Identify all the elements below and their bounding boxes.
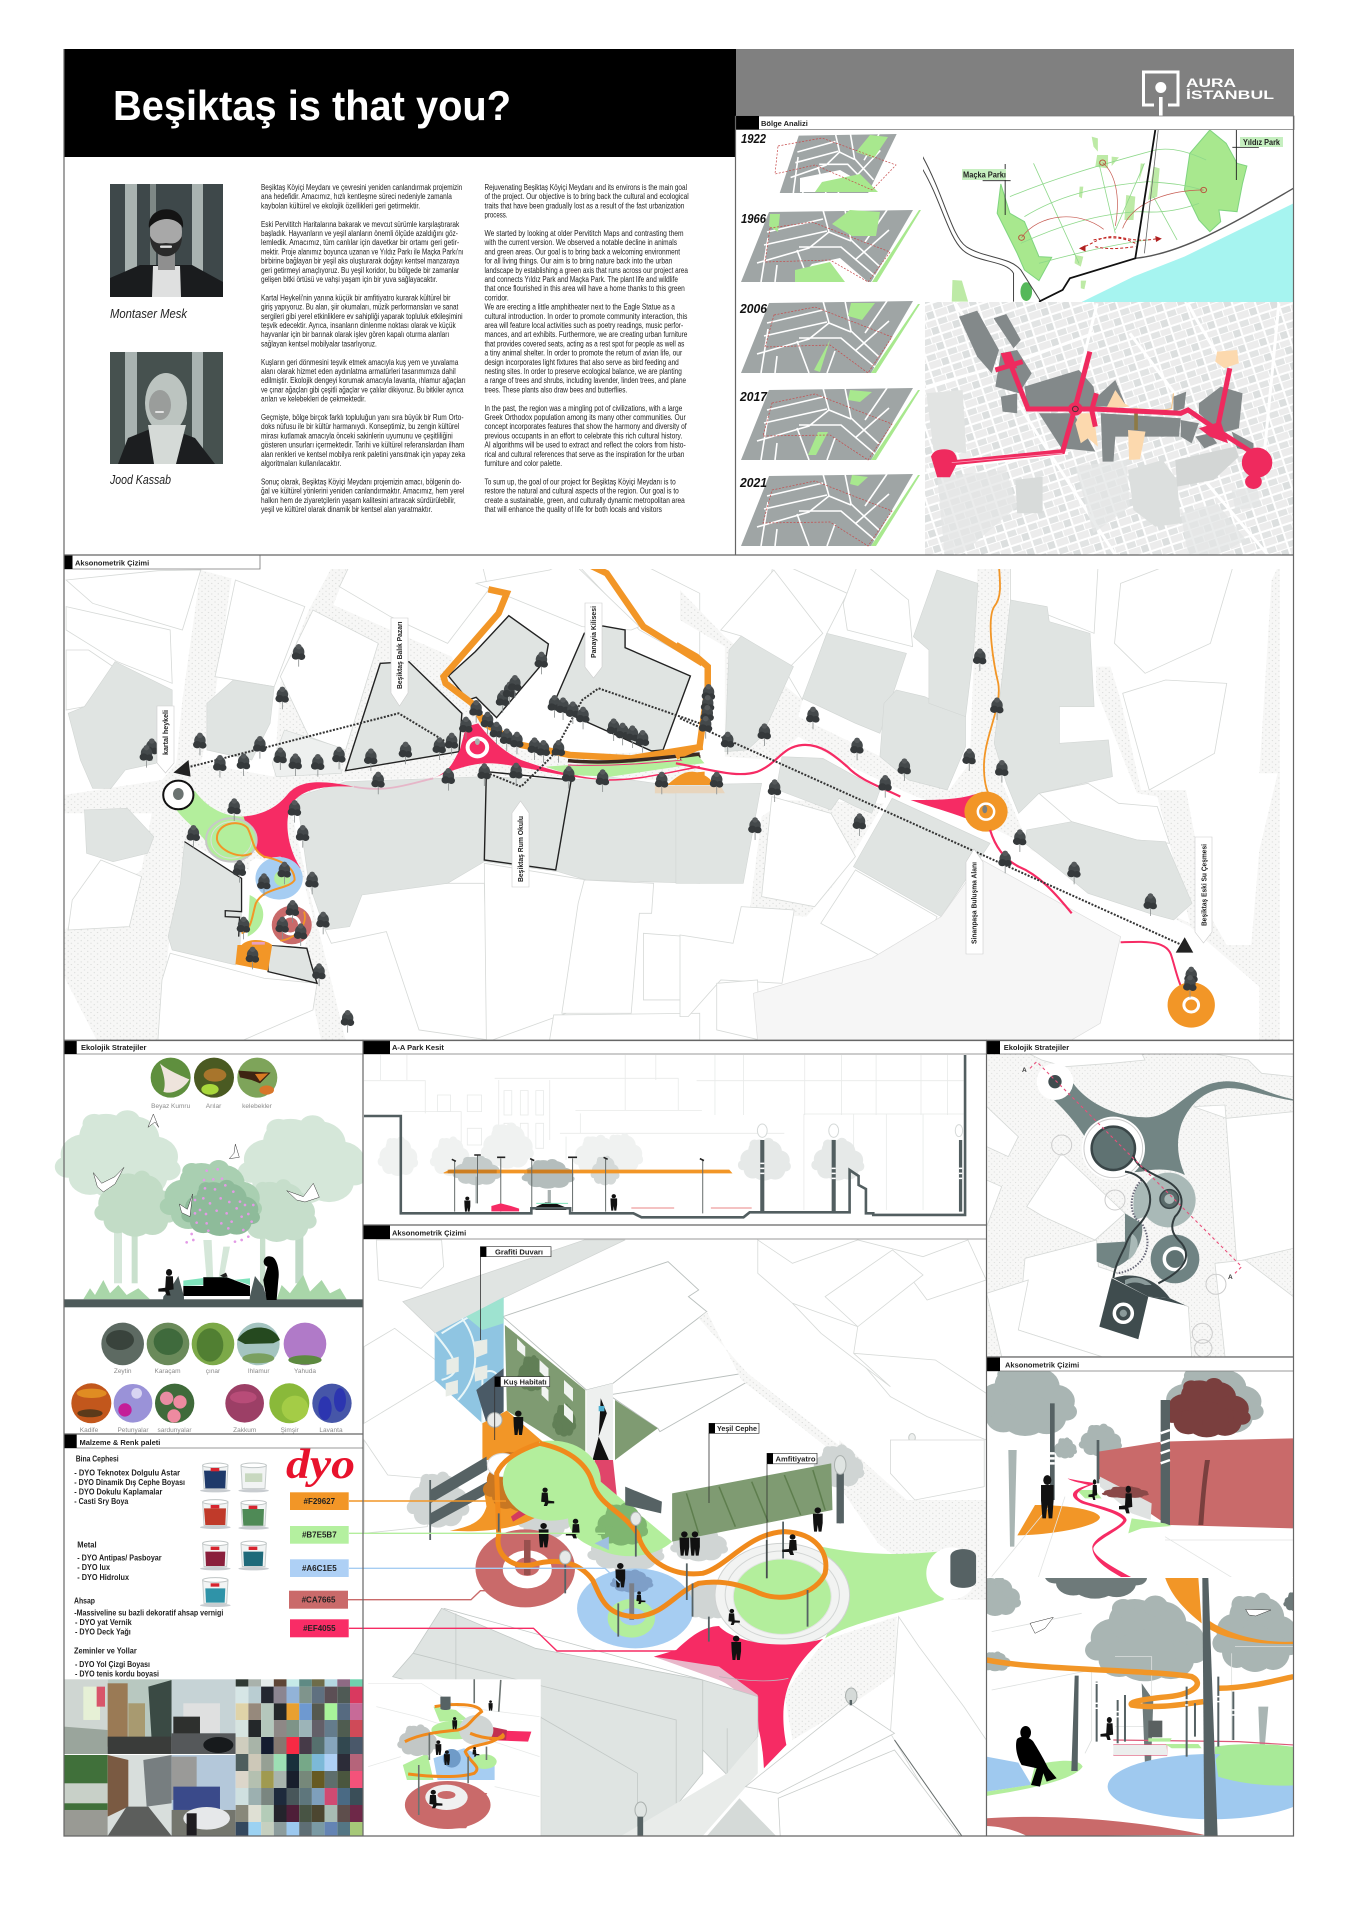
text block: Turkish description: lemledik. Amacımız, tüm canlılar için davetkar bir ortamı geri getir-	[261, 238, 459, 247]
wildlife photos	[151, 1058, 277, 1098]
material list: - DYO Yol Çizgi Boyası	[75, 1660, 150, 1669]
text block: Turkish description: ve çınar ağaçları gibi çeşitli ağaçlar ve çalılar dikiyoruz. Bu bitkiler ayrıca	[261, 385, 464, 394]
text block: English description: area will feature local activities such as poetry readings, music perfor-	[484, 321, 683, 330]
text block: English description: that once flourished in this area will have a home thanks to this green	[484, 284, 685, 293]
heading: Ekolojik Stratejiler (plan)	[986, 1040, 1294, 1054]
panel: canopy perspective with orange ribbon	[987, 1578, 1293, 1836]
text block: English description: corridor.	[484, 293, 509, 302]
species captions: Yahuda	[294, 1368, 316, 1375]
callout: Yeşil Cephe	[709, 1423, 759, 1503]
text block: Turkish description: ğal ve kültürel yönlerini yeniden canlandırmaktır. Amacımız, hem yerel	[261, 487, 465, 496]
text block: English description: traits that have been gradually lost as a result of the fast urbanization	[484, 201, 684, 210]
heading: A-A Park Kesit	[363, 1040, 986, 1054]
text block: Turkish description: halkın hem de ziyaretçilerin yaşam kalitesini artıracak sürdürülebilir,	[261, 496, 456, 505]
text block: Turkish description: sergileri gibi yerel etkinliklere ev sahipliği yaparak topluluk etkileşimini	[261, 312, 463, 321]
map series: 1966	[741, 210, 921, 282]
species captions: Lavanta	[319, 1427, 343, 1434]
label: Sinanpaşa Buluşma Alanı: Sinanpaşa Buluşma Alanı	[972, 862, 978, 944]
heading: A-A Park Kesit: A-A Park Kesit	[392, 1043, 444, 1052]
text block: Turkish description: Geçmişte, bölge birçok farklı topluluğun yanı sıra büyük bir Rum Orto-	[261, 413, 464, 422]
species captions: kelebekler	[242, 1103, 273, 1110]
name: Montaser Mesk: Montaser Mesk	[110, 306, 188, 321]
text block: Turkish description: kaybolan kültürel ve ekolojik özellikleri geri getirmektir.	[261, 201, 420, 210]
text block: Turkish description: gelişen bitki örtüsü ve vahşi yaşam için bir yuva sağlayacaktır.	[261, 275, 438, 284]
text block: Turkish description: yeşil ve kültürel olarak dinamik bir kentsel alan yaratmaktır.	[261, 505, 432, 514]
grey logo banner	[736, 49, 1294, 116]
text block: English description: for all living things. Our aim is to bring nature back into the urban	[484, 257, 672, 266]
heading: Aksonometrik Çizimi (right): Aksonometrik Çizimi	[1005, 1360, 1079, 1370]
panel: Ekolojik Stratejiler (species and section)	[55, 1040, 368, 1434]
text block: English description: of the project. Our objective is to bring back the cultural and ecological	[484, 192, 689, 201]
panel: Ekolojik Stratejiler site plan: A	[1022, 1067, 1027, 1074]
text block: English description	[484, 183, 689, 514]
panel: Ekolojik Stratejiler site plan: A	[1228, 1274, 1233, 1281]
text block: Turkish description: teşvik edecektir. Ayrıca, insanların dinlenme noktası olarak ve küçük	[261, 321, 456, 330]
text block: English description: cultural introduction. In order to promote community interaction, this	[484, 312, 687, 321]
orange corridor	[444, 557, 703, 758]
label: Beşiktaş Balık Pazarı	[391, 618, 408, 706]
callout: Kuş Habitatı: Kuş Habitatı	[504, 1379, 547, 1386]
material list: - Casti Sry Boya	[74, 1497, 129, 1506]
material list: - DYO Hidrolux	[77, 1573, 130, 1582]
callout: Amfitiyatro: Amfitiyatro	[776, 1456, 816, 1464]
text block: Turkish description: Kuşların geri dönmesini teşvik etmek amacıyla kuş yem ve yuvalama	[261, 358, 459, 367]
grey logo banner: AURA	[1186, 76, 1236, 90]
material list: Zeminler ve Yollar	[74, 1646, 137, 1655]
text block: Turkish description: arıları ve kelebekleri de çekmektedir.	[261, 395, 366, 404]
text block: Turkish description: başladık. Hayvanların ve yeşil alanların önemli ölçüde azaldığını göz-	[261, 229, 458, 238]
label: Beşiktaş Rum Okulu	[512, 801, 529, 887]
label: Yıldız Park: Yıldız Park	[1243, 138, 1280, 147]
panel: central axonometric view	[363, 1239, 986, 1836]
inset perspective	[363, 1679, 541, 1836]
text block: English description: previous occupants in an effort to celebrate this rich cultural history.	[484, 431, 682, 440]
species captions: Şimşir	[281, 1427, 300, 1434]
map series: 1922: 1922	[741, 132, 766, 146]
text block: Turkish description: sağlayan kentsel mobilyalar tasarlıyoruz.	[261, 339, 377, 348]
material list: - DYO Dinamik Dış Cephe Boyası	[74, 1478, 185, 1487]
species captions: Kadife	[80, 1427, 99, 1434]
callout: Yeşil Cephe: Yeşil Cephe	[717, 1426, 757, 1433]
species captions: Zeytin	[114, 1368, 132, 1375]
text block: Turkish description: Sonuç olarak, Beşiktaş Köyiçi Meydanı projemizin amacı, bölgenin do-	[261, 477, 462, 486]
heading: Malzeme & Renk paleti	[64, 1434, 363, 1448]
text block: Turkish description: geri getirmeyi amaçlıyoruz. Bu yeşil koridor, bu bölgede bir zamanlar	[261, 266, 459, 275]
AI colour mosaic	[236, 1679, 363, 1836]
text block: Turkish description	[261, 183, 466, 514]
text block: English description: a range of trees and shrubs, including lavender, linden trees, and plane	[484, 376, 687, 385]
heading: Ekolojik Stratejiler (plan): Ekolojik Stratejiler	[1004, 1043, 1069, 1052]
panel: Ekolojik Stratejiler site plan	[986, 1040, 1294, 1357]
right half of map: roads, buildings, route	[668, 557, 1280, 1040]
title banner	[64, 49, 736, 157]
label: Panayia Kilisesi: Panayia Kilisesi	[591, 606, 598, 658]
text block: English description: nesting sites. In order to preserve ecological balance, we are planting	[484, 367, 682, 376]
colour palette chips with leader lines: #A6C1E5	[302, 1564, 337, 1573]
map series: 1966: 1966	[741, 212, 767, 226]
text block: English description: and connects Yıldız Park and Maçka Park. The plant life and wildlife	[484, 275, 678, 284]
text block: Turkish description: doks nüfusu ile bir kültür harmanıydı. Konseptimiz, bu zengin kültürel	[261, 422, 459, 431]
callout: Grafiti Duvarı	[480, 1247, 551, 1340]
heading: Aksonometrik Çizimi (centre): Aksonometrik Çizimi	[392, 1228, 466, 1238]
colour palette chips with leader lines: #B7E5B7	[302, 1530, 337, 1540]
text block: English description: with the current version. We observed a notable decline in animals	[484, 238, 677, 247]
panel: A-A Park Kesit section	[363, 1040, 986, 1225]
text block: English description: process.	[484, 211, 508, 220]
label: Panayia Kilisesi	[585, 603, 602, 678]
text block: Turkish description: gösteren unsurları içermektedir. Tarihi ve kültürel referanslardan ilham	[261, 441, 465, 450]
material list: Bina Cephesi	[76, 1455, 119, 1464]
material list: - DYO Teknotex Dolgulu Astar	[74, 1468, 180, 1477]
species captions: Beyaz Kumru	[151, 1103, 191, 1110]
text block: Turkish description: alan renkleri ve kentsel mobilya renk paletini yansıtmak için yapay zeka	[261, 450, 466, 459]
map series: 2017	[739, 388, 920, 460]
text block: Turkish description: algoritmaları kullanılacaktır.	[261, 459, 341, 468]
text block: Turkish description: hayvanlar için bir barınak olarak işlev gören kapalı oturma alanları	[261, 330, 449, 339]
text block: Turkish description: alanı olarak hizmet eden aydınlatma armatürleri tasarımımıza dahil	[261, 367, 456, 376]
heading: Aksonometrik Çizimi (centre)	[363, 1225, 986, 1239]
text block: English description: Greek Orthodox population among its many other communities. Our	[484, 413, 686, 422]
label: Beşiktaş Eski Su Çeşmesi: Beşiktaş Eski Su Çeşmesi	[1202, 844, 1208, 926]
text block: English description: In the past, the region was a mingling pot of civilizations, with a large	[484, 404, 683, 413]
title banner: Beşiktaş is that you?	[113, 82, 511, 129]
material list: -Massiveline su bazli dekoratif ahsap vernigi	[74, 1609, 223, 1618]
text block: Turkish description: mektir. Proje alanımız boyunca uzanan ve Yıldız Parkı ile Maçka Parkı'nı	[261, 247, 464, 256]
material list: Metal	[77, 1540, 97, 1549]
text block: English description: that provides covered seats, acting as a rest spot for people as well as	[484, 339, 684, 348]
species captions: Karaçam	[154, 1368, 181, 1375]
map series: 2017: 2017	[739, 390, 768, 404]
colour palette chips with leader lines: #EF4055	[303, 1624, 336, 1633]
text block: English description: create a sustainable, green, and culturally dynamic metropolitan area	[484, 496, 685, 505]
map series: 2021	[739, 474, 920, 546]
text block: English description: that will enhance the quality of life for both locals and visitors	[484, 505, 662, 514]
text block: Turkish description: Beşiktaş Köyiçi Meydanı ve çevresini yeniden canlandırmak projemizin	[261, 183, 462, 192]
text block: English description: We started by looking at older Pervititch Maps and contrasting them	[484, 229, 684, 238]
logo: dyo: dyo	[286, 1442, 355, 1488]
panel: Bölge Analizi heading: Bölge Analizi	[761, 119, 808, 128]
species captions	[80, 1103, 343, 1434]
site photos	[64, 1679, 236, 1836]
text block: Turkish description: birbirine bağlayan bir yeşil aks oluşturarak doğayı kentsel manzaraya	[261, 257, 460, 266]
grey logo banner: İSTANBUL	[1186, 87, 1274, 102]
colour palette chips with leader lines	[289, 1492, 678, 1651]
left half of map: roads and buildings	[64, 557, 705, 1040]
material list: Ahsap	[74, 1596, 95, 1605]
colour palette chips with leader lines: #F29627	[304, 1497, 336, 1506]
text block: Turkish description: Eski Pervititch Haritalarına bakarak ve mevcut sürümle karşılaştırarak	[261, 220, 460, 229]
text block: Turkish description: mirası kutlamak amacıyla önceki sakinlerin uyumunu ve çeşitliliğini	[261, 431, 453, 440]
heading: Ekolojik Stratejiler	[64, 1040, 363, 1054]
panel: street perspective with red wall	[975, 1363, 1293, 1577]
flower and shrub photos	[71, 1383, 352, 1423]
text block: English description: rical and cultural references that serve as the inspiration for the urban	[484, 450, 684, 459]
heading: Ekolojik Stratejiler: Ekolojik Stratejiler	[81, 1043, 147, 1052]
material list: - DYO Deck Yağı	[75, 1628, 131, 1637]
label: Maçka Parkı: Maçka Parkı	[963, 170, 1006, 180]
material list: - DYO Antipas/ Pasboyar	[77, 1554, 162, 1563]
map series: 1922	[741, 132, 897, 193]
portrait: Jood Kassab	[110, 352, 223, 464]
text block: Turkish description: edilmiştir. Ekolojik dengeyi korumak amacıyla lavanta, ıhlamur ağaçları	[261, 376, 466, 385]
text block: Turkish description: Kartal Heykeli'nin yanına küçük bir amfitiyatro kurarak kültürel bir	[261, 293, 451, 302]
text block: English description: We are erecting a little amphitheater next to the Eagle Statue as a	[484, 303, 675, 312]
species captions: Ihlamur	[248, 1368, 270, 1375]
heading: Aksonometrik Çizimi (map)	[64, 555, 260, 569]
text block: Turkish description: giriş yapıyoruz. Bu alan, şiir okumaları, müzik performansları ve sanat	[261, 303, 459, 312]
map series: 2021: 2021	[739, 476, 767, 490]
heading: Aksonometrik Çizimi (map): Aksonometrik Çizimi	[75, 558, 149, 568]
material list: - DYO tenis kordu boyasi	[75, 1669, 159, 1678]
text block: Turkish description: ana hedefidir. Amacımız, hızlı kentleşme süreci nedeniyle zamanla	[261, 192, 452, 201]
species captions: Zakkum	[233, 1427, 256, 1434]
text block: English description: trees. These plants also draw bees and butterflies.	[484, 385, 627, 394]
text block: English description: Rejuvenating Beşiktaş Köyiçi Meydanı and its environs is the main goal	[484, 183, 687, 192]
text block: English description: restore the natural and cultural aspects of the region. Our goal is to	[484, 487, 679, 496]
label: Beşiktaş Eski Su Çeşmesi	[1195, 837, 1212, 943]
tree species photos	[101, 1323, 326, 1365]
text block: English description: furniture and color palette.	[484, 459, 562, 468]
paint can icons	[200, 1463, 269, 1607]
heading: Malzeme & Renk paleti: Malzeme & Renk paleti	[80, 1438, 160, 1447]
tree and bench section	[55, 1110, 368, 1307]
pink plazas	[242, 782, 354, 868]
callout: Amfitiyatro	[767, 1453, 817, 1578]
label: kartal heykeli	[157, 706, 174, 773]
material list	[74, 1455, 223, 1678]
callout: Grafiti Duvarı: Grafiti Duvarı	[495, 1249, 543, 1256]
material list: - DYO lux	[77, 1563, 110, 1572]
colour palette chips with leader lines: #CA7665	[302, 1596, 336, 1604]
text block: English description: To sum up, the goal of our project for Beşiktaş Köyiçi Meydanı is to	[484, 477, 676, 486]
label: Sinanpaşa Buluşma Alanı	[966, 849, 983, 954]
map: green corridor between parks	[923, 130, 1297, 303]
text block: English description: concept incorporates features that show the harmony and diversity of	[484, 422, 687, 431]
map series: 2006: 2006	[739, 302, 768, 316]
text block: English description: AI algorithms will be used to extract and reflect the colors from histo-	[484, 441, 686, 450]
panel: Bölge Analizi heading	[736, 116, 1294, 130]
label: Beşiktaş Rum Okulu: Beşiktaş Rum Okulu	[518, 816, 525, 882]
map: street plan with pink route	[925, 302, 1294, 555]
panel: main axonometric map	[64, 555, 1294, 1041]
text block: English description: a tiny animal shelter. In order to promote the return of avian life, our	[484, 349, 682, 358]
callout: Kuş Habitatı	[495, 1377, 550, 1440]
label: kartal heykeli: kartal heykeli	[163, 710, 170, 755]
material list: - DYO Dokulu Kaplamalar	[74, 1487, 162, 1496]
material list: - DYO yat Vernik	[75, 1618, 132, 1627]
species captions: Petunyalar	[117, 1427, 149, 1434]
text block: English description: and green areas. Our goal is to bring back a welcoming environment	[484, 247, 681, 256]
species captions: Arılar	[206, 1103, 222, 1110]
map series: 2006	[739, 301, 920, 373]
text block: English description: landscape by establishing a green axis that runs across our project area	[484, 266, 688, 275]
label: Beşiktaş Balık Pazarı: Beşiktaş Balık Pazarı	[397, 621, 404, 689]
heading: Aksonometrik Çizimi (right)	[986, 1357, 1294, 1371]
text block: English description: mances, and art exhibits. Furthermore, we are creating urban furniture	[484, 330, 688, 339]
species captions: çınar	[206, 1368, 221, 1375]
portrait: Montaser Mesk	[110, 184, 223, 297]
species captions: sardunyalar	[158, 1427, 192, 1434]
text block: English description: design incorporates light fixtures that also serve as bird feeding and	[484, 358, 679, 367]
name: Jood Kassab: Jood Kassab	[109, 472, 171, 487]
dotted axes and markers	[191, 688, 700, 787]
